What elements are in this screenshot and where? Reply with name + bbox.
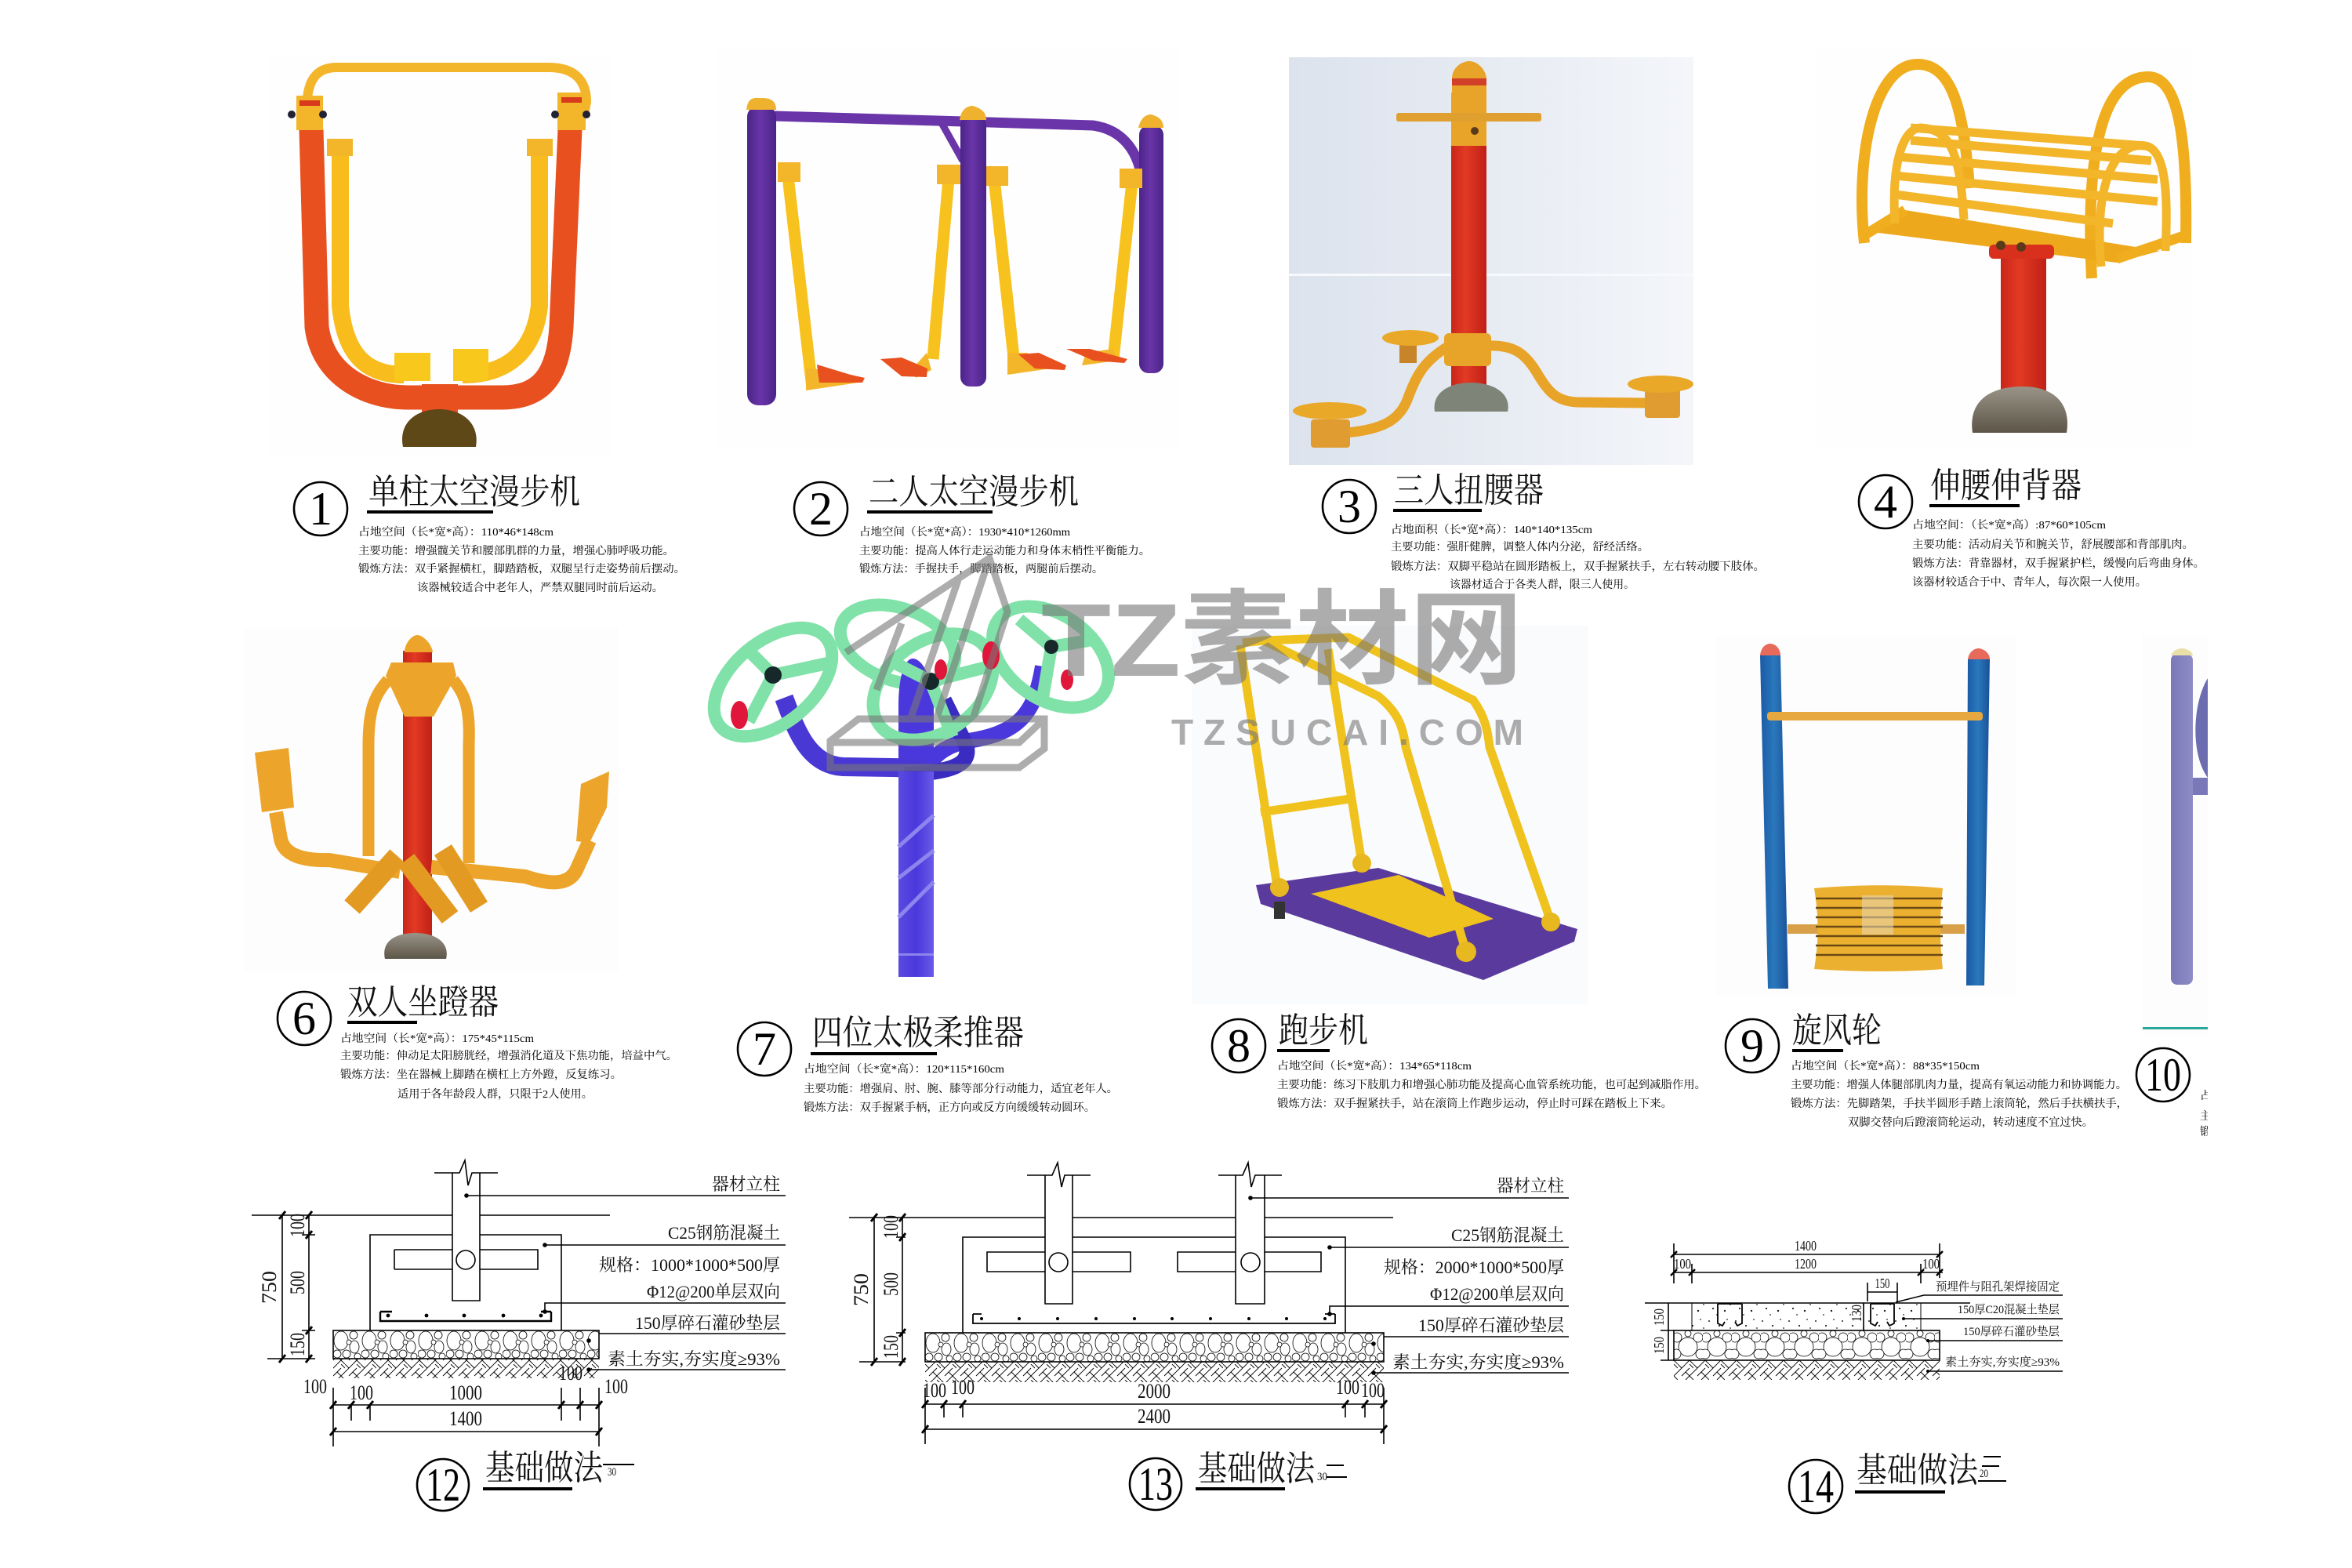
panel: item 7 four-person tai chi pusher [694,586,1127,1114]
dimension labels 1: 150 [286,1333,309,1356]
badge 1 [294,482,347,535]
spec text 9: 锻炼方法：先脚踏架，手扶半圆形手踏上滚筒轮，然后手扶横扶手， [1791,1097,2128,1110]
photo: waist and back stretcher [1815,47,2191,447]
watermark wordmark: TZ素材网 [1041,583,1523,698]
material callouts 1: 规格：1000*1000*500厚 [599,1255,780,1275]
dimension labels 2: 2400 [1138,1405,1171,1428]
dimension labels 1: 1400 [449,1407,482,1430]
badge 1: 1 [309,483,332,535]
dimension labels 3: 100 [1674,1256,1691,1272]
panel: item 1 single-post space walker [267,55,685,594]
title 9: 旋风轮 [1792,1011,1882,1050]
spec text 4: 占地空间：（长*宽*高）:87*60*105cm [1912,518,2106,532]
cropped spec text 10: 占地 [2200,1089,2222,1102]
dimension labels 3: 1200 [1795,1256,1817,1272]
photo: whirlwind wheel [1716,637,2016,996]
material callouts 1 [599,1174,780,1369]
material callouts 2: C25钢筋混凝土 [1451,1225,1564,1245]
spec text 3: 占地面积（长*宽*高）：140*140*135cm [1391,523,1592,536]
material callouts 3: 150厚C20混凝土垫层 [1958,1303,2060,1316]
material callouts 3: 素土夯实,夯实度≥93% [1945,1355,2060,1369]
spec text 2: 锻炼方法：手握扶手，脚踏踏板，两腿前后摆动。 [859,562,1103,575]
spec text 4 [1912,518,2205,589]
badge 6 [278,992,331,1045]
material callouts 1: Φ12@200单层双向 [647,1282,780,1301]
dimension labels 3 [1651,1238,1940,1354]
title underline 4 [1929,504,2020,507]
material callouts 1: 150厚碎石灌砂垫层 [635,1313,780,1333]
photo: four-person tai chi pusher [694,586,1127,977]
spec text 7 [804,1062,1118,1114]
title underline 2 [867,510,993,514]
spec text 3: 锻炼方法：双脚平稳站在圆形踏板上，双手握紧扶手，左右转动腰下肢体。 [1391,560,1765,573]
dimension labels 1 [258,1214,628,1430]
panel: foundation detail 1 [252,1160,786,1511]
panel: item 8 treadmill [1192,626,1706,1110]
spec text 9 [1791,1059,2128,1129]
badge 2 [794,482,848,535]
title underline 7 [811,1052,937,1055]
spec text 6: 适用于各年龄段人群，只限于2人使用。 [397,1087,593,1101]
spec text 1 [358,525,685,594]
material callouts 2: 规格：2000*1000*500厚 [1384,1258,1564,1277]
panel: item 2 two-person space walker [717,47,1180,575]
badge 4: 4 [1874,476,1897,528]
spec text 1: 主要功能：增强髋关节和腰部肌群的力量，增强心肺呼吸功能。 [358,544,674,557]
watermark logo [830,558,1044,768]
spec text 6 [340,1032,677,1101]
material callouts 3 [1936,1279,2060,1369]
dimension labels 2: 100 [880,1215,902,1239]
dimension labels 2: 150 [880,1335,902,1359]
photo: two-person space walker [717,47,1180,447]
watermark [830,558,1523,768]
photo: two-person seated pedal [245,627,619,972]
dimension labels 3: 150 [1651,1337,1667,1354]
spec text 1: 该器械较适合中老年人，严禁双腿同时前后运动。 [417,581,663,594]
badge 2: 2 [809,483,833,535]
dimension labels 1: 100 [303,1375,327,1398]
title 1: 单柱太空漫步机 [368,473,580,511]
spec text 3: 该器材适合于各类人群，限三人使用。 [1450,578,1635,591]
dimension labels 3: 100 [1922,1256,1940,1272]
badge 3: 3 [1338,481,1361,532]
material callouts 3: 预埋件与阻孔架焊接固定 [1936,1279,2060,1294]
dimension labels 1: 500 [286,1271,309,1294]
panel: item 10 cropped [2136,648,2208,1137]
spec text 8 [1277,1059,1706,1110]
title 12: 基础做法 [485,1449,604,1487]
badge 13: 13 [1138,1458,1173,1510]
badge 10: 10 [2145,1049,2181,1101]
dimension labels 2: 100 [1361,1379,1385,1402]
photo: three-person waist twister [1289,57,1693,465]
material callouts 3: 150厚碎石灌砂垫层 [1963,1324,2060,1338]
material callouts 2: 150厚碎石灌砂垫层 [1418,1316,1564,1335]
spec text 6: 占地空间（长*宽*高）：175*45*115cm [340,1032,534,1045]
dimension labels 3: 130 [1849,1305,1864,1322]
material callouts 2: Φ12@200单层双向 [1430,1284,1564,1304]
material callouts 1: 素土夯实,夯实度≥93% [608,1349,780,1369]
title 13: 基础做法 [1198,1450,1316,1488]
spec text 7: 主要功能：增强肩、肘、腕、膝等部分行动能力，适宜老年人。 [804,1082,1118,1095]
spec text 1: 锻炼方法：双手紧握横杠，脚踏踏板，双腿呈行走姿势前后摆动。 [358,562,685,575]
spec text 9: 主要功能：增强人体腿部肌肉力量，提高有氧运动能力和协调能力。 [1791,1078,2127,1091]
dimension labels 2: 2000 [1138,1380,1171,1403]
panel: item 6 two-person seated pedal [245,627,677,1101]
photo: cropped item 10 [2143,635,2209,1035]
spec text 2: 占地空间（长*宽*高）：1930*410*1260mm [859,525,1070,539]
material callouts 1: 器材立柱 [712,1174,780,1194]
material callouts 2: 素土夯实,夯实度≥93% [1392,1352,1564,1372]
dimension labels 2: 500 [880,1272,902,1296]
section drawing 3 [1645,1243,2063,1380]
title underline 9 [1792,1049,1843,1052]
badge 8: 8 [1227,1020,1250,1072]
badge 8 [1212,1019,1265,1073]
dimension labels 2: 100 [923,1379,946,1402]
spec text 3: 主要功能：强肝健脾，调整人体内分泌，舒经活络。 [1391,540,1649,554]
cropped spec text 10 [2200,1090,2208,1137]
spec text 7: 锻炼方法：双手握紧手柄，正方向或反方向缓缓转动圆环。 [804,1101,1095,1114]
title 3: 三人扭腰器 [1394,471,1544,510]
spec text 6: 主要功能：伸动足太阳膀胱经，增强消化道及下焦功能，培益中气。 [340,1049,677,1062]
title underline 1 [367,510,493,514]
spec text 2 [859,525,1150,575]
watermark url: TZSUCAI.COM [1171,712,1523,753]
badge 3 [1323,480,1376,533]
dimension labels 2: 100 [951,1376,975,1399]
material callouts 1: C25钢筋混凝土 [668,1223,780,1243]
title 12: 30 [608,1466,616,1479]
title 13: 30 [1317,1471,1327,1483]
title 2: 二人太空漫步机 [869,473,1079,511]
badge 9: 9 [1740,1020,1764,1072]
panel: item 9 whirlwind wheel [1716,637,2128,1129]
spec text 4: 该器材较适合于中、青年人，每次限一人使用。 [1912,575,2147,589]
badge 14: 14 [1798,1461,1834,1512]
title 4: 伸腰伸背器 [1930,466,2082,505]
dimension labels 2 [850,1215,1385,1428]
title underline 8 [1277,1049,1330,1052]
badge 4 [1859,475,1912,528]
badge 9 [1726,1019,1779,1073]
title 8: 跑步机 [1279,1011,1368,1050]
dimension labels 3: 150 [1875,1276,1889,1291]
material callouts 2 [1384,1176,1564,1372]
panel: item 3 three-person waist twister [1289,57,1765,591]
badge 6: 6 [292,993,316,1044]
dimension labels 2: 750 [850,1273,873,1306]
section drawing 2 [849,1163,1569,1444]
dimension labels 3: 1400 [1795,1238,1817,1254]
dimension labels 1: 100 [559,1362,583,1385]
dimension labels 2: 100 [1336,1376,1359,1399]
spec text 8: 占地空间（长*宽*高）：134*65*118cm [1277,1059,1472,1073]
dimension labels 1: 100 [350,1381,373,1404]
spec text 9: 占地空间（长*宽*高）：88*35*150cm [1791,1059,1980,1073]
dimension labels 3: 150 [1651,1308,1667,1326]
spec text 8: 锻炼方法：双手握紧扶手，站在滚筒上作跑步运动，停止时可踩在踏板上下来。 [1277,1097,1672,1110]
panel: foundation detail 3 [1645,1238,2063,1513]
title 7: 四位太极柔推器 [812,1014,1024,1052]
panel: item 4 waist and back stretcher [1815,47,2205,589]
spec text 8: 主要功能：练习下肢肌力和增强心肺功能及提高心血管系统功能，也可起到减脂作用。 [1277,1078,1706,1091]
photo: single-post space walker [267,55,612,455]
spec text 1: 占地空间（长*宽*高）：110*46*148cm [358,525,554,539]
badge 7 [738,1022,791,1076]
cropped spec text 10: 锻炼 [2200,1125,2223,1138]
title 14: 20 [1980,1468,1988,1480]
dimension labels 1: 1000 [449,1381,482,1404]
section drawing 1 [252,1160,786,1446]
title 6: 双人坐蹬器 [347,983,499,1022]
title underline 6 [347,1021,417,1024]
material callouts 2: 器材立柱 [1497,1176,1564,1196]
title 14: 基础做法 [1857,1451,1979,1490]
spec text 9: 双脚交替向后蹬滚筒轮运动，转动速度不宜过快。 [1848,1116,2093,1129]
spec text 6: 锻炼方法：坐在器械上脚踏在横杠上方外蹬，反复练习。 [340,1068,622,1081]
panel: foundation detail 2 [849,1163,1569,1510]
spec text 3 [1391,523,1765,591]
dimension labels 1: 100 [604,1375,628,1398]
spec text 7: 占地空间（长*宽*高）：120*115*160cm [804,1062,1004,1076]
cropped spec text 10: 主要 [2200,1110,2222,1123]
dimension labels 1: 100 [286,1214,309,1237]
title underline 3 [1393,509,1482,512]
photo: treadmill [1192,626,1588,1004]
spec text 4: 锻炼方法：背靠器材，双手握紧护栏，缓慢向后弯曲身体。 [1912,557,2205,570]
spec text 2: 主要功能：提高人体行走运动能力和身体末梢性平衡能力。 [859,544,1150,557]
dimension labels 1: 750 [258,1271,281,1304]
badge 12: 12 [426,1459,460,1511]
badge 7: 7 [753,1023,776,1075]
spec text 4: 主要功能：活动肩关节和腕关节，舒展腰部和背部肌肉。 [1912,538,2194,551]
